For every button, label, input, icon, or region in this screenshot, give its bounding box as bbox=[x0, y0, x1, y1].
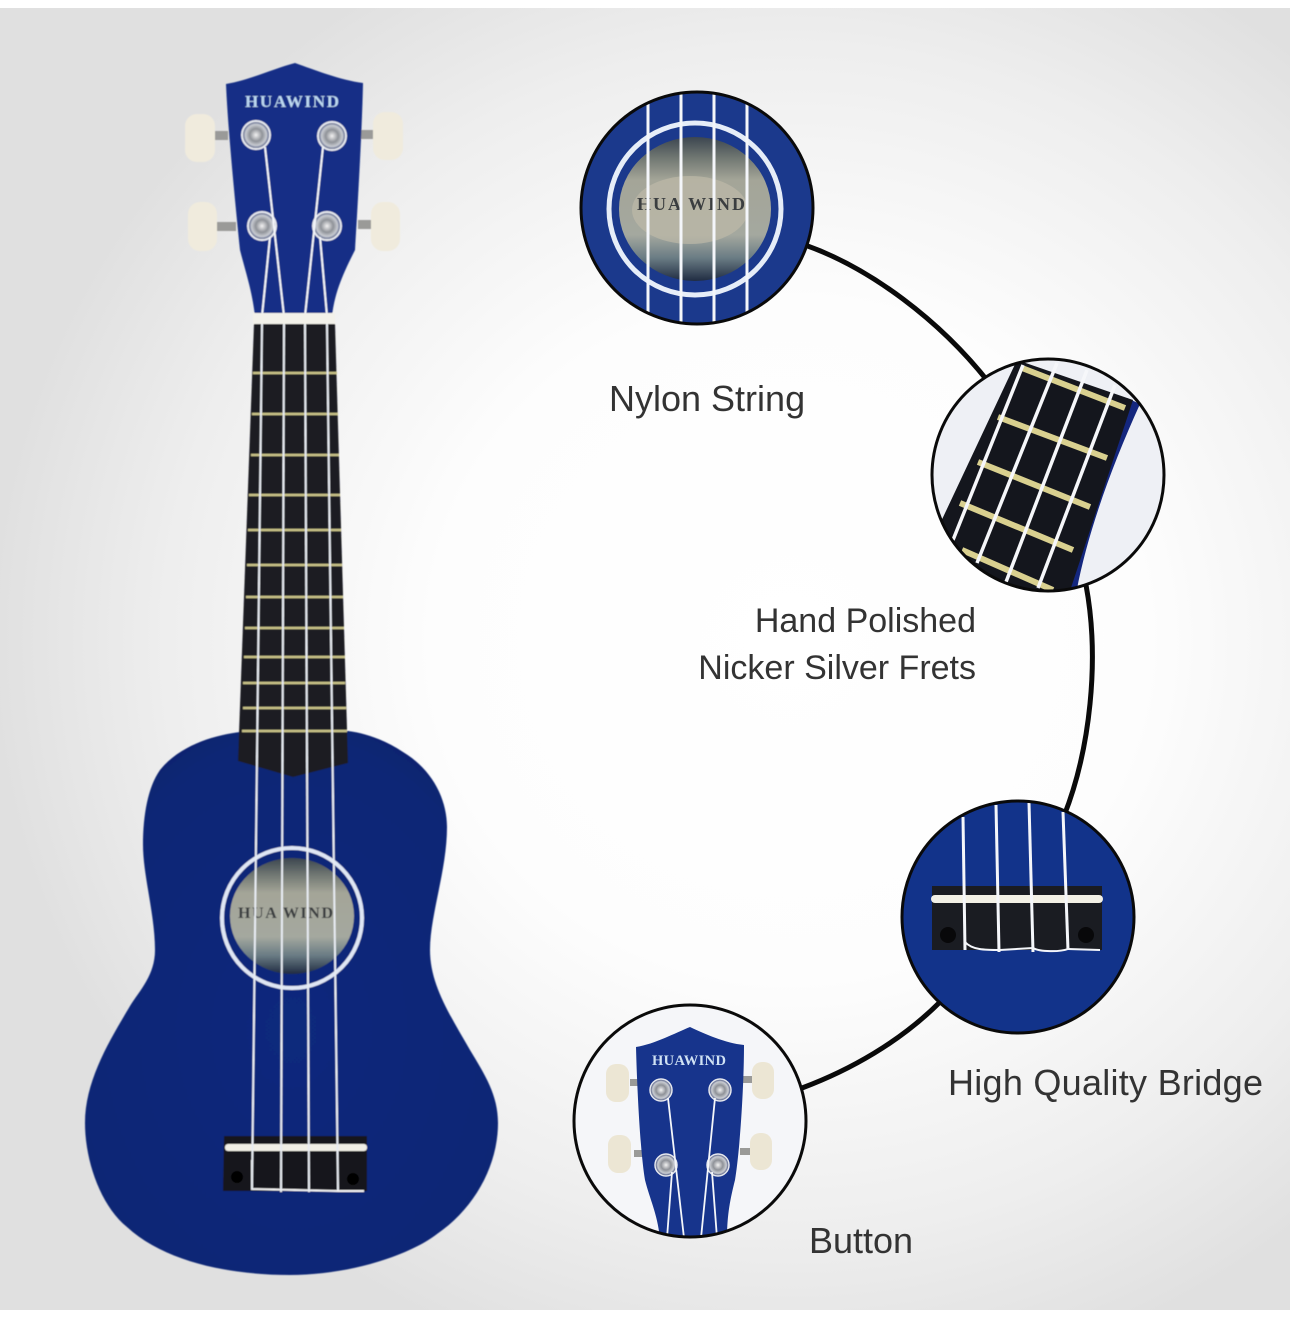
headstock bbox=[226, 63, 363, 316]
detail circle: frets bbox=[930, 358, 1170, 600]
headstock strings bbox=[262, 147, 327, 316]
label: hand polished frets: Hand Polished bbox=[755, 602, 976, 640]
label text in sound hole: HUA WIND bbox=[637, 194, 745, 214]
label: high quality bridge: High Quality Bridge bbox=[948, 1062, 1263, 1103]
detail circle: sound hole and strings bbox=[575, 88, 820, 328]
fretboard bbox=[238, 324, 348, 777]
connector curve between detail circles bbox=[802, 245, 1092, 1088]
detail circle: bridge bbox=[900, 800, 1136, 1036]
label: button: Button bbox=[809, 1220, 913, 1261]
nut bbox=[253, 313, 335, 324]
label: nylon string: Nylon String bbox=[609, 378, 805, 419]
bridge bbox=[223, 1136, 367, 1191]
sound hole bbox=[222, 848, 362, 988]
tuner posts bbox=[242, 121, 346, 240]
brand name on small headstock: HUAWIND bbox=[652, 1053, 726, 1069]
body bbox=[85, 731, 498, 1275]
ukulele main image bbox=[85, 63, 498, 1275]
detail circle: tuning buttons bbox=[570, 1000, 810, 1240]
sound hole: HUA WIND bbox=[238, 905, 333, 922]
tuning pegs bbox=[185, 112, 403, 251]
strings bbox=[252, 324, 338, 1192]
frets bbox=[242, 373, 347, 731]
label: hand polished frets: Nicker Silver Frets bbox=[698, 649, 976, 687]
brand name on headstock: HUAWIND bbox=[245, 92, 339, 111]
